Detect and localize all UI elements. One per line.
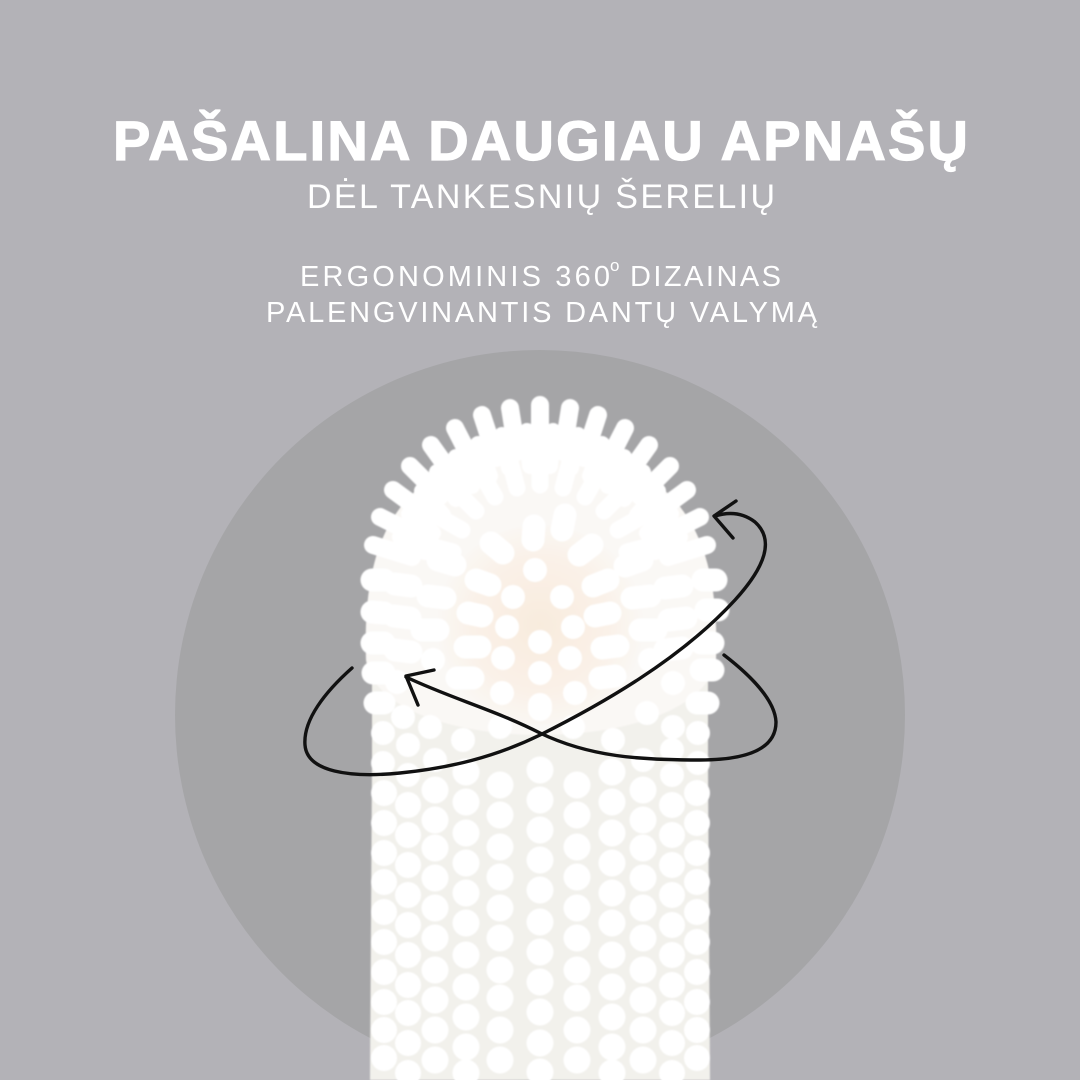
- feature text: [266, 256, 818, 329]
- rotation arrow: left loop to top right: [305, 501, 765, 775]
- feature text: PALENGVINANTIS DANTŲ VALYMĄ: [266, 297, 818, 329]
- brush dome base: [366, 450, 716, 735]
- dome inner ring bristles: [419, 450, 661, 552]
- title: PAŠALINA DAUGIAU APNAŠŲ: [113, 109, 968, 172]
- rotation arrow: right loop to left: [406, 655, 776, 760]
- lower bristle grid: [435, 770, 643, 1073]
- inner round bristles: [383, 570, 698, 775]
- dome outer bristles: [373, 405, 707, 557]
- inner elongated bristles: [372, 515, 718, 703]
- feature text: o: [610, 256, 619, 275]
- brush body lower: [370, 620, 710, 1080]
- background circle: [175, 350, 905, 1080]
- dome secondary bristles: [400, 431, 680, 552]
- feature text: DIZAINAS: [630, 261, 781, 293]
- subtitle: DĖL TANKESNIŲ ŠERELIŲ: [307, 178, 775, 216]
- brush cream centre: [435, 525, 645, 725]
- feature text: ERGONOMINIS 360: [300, 261, 610, 293]
- toothbrush illustration: [366, 405, 718, 1080]
- lower edge bristles: [384, 793, 697, 1073]
